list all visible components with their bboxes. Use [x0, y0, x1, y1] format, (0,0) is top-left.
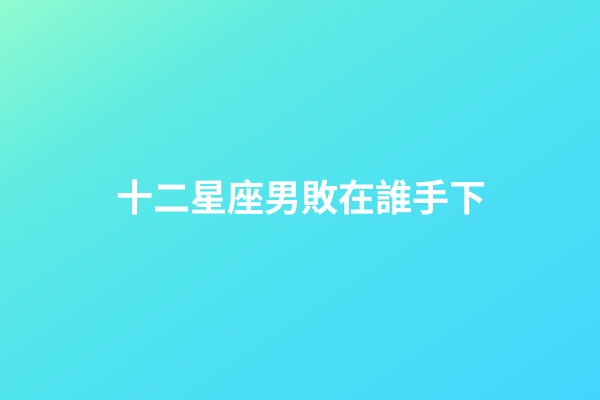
title: 十二星座男敗在誰手下 — [116, 178, 486, 219]
